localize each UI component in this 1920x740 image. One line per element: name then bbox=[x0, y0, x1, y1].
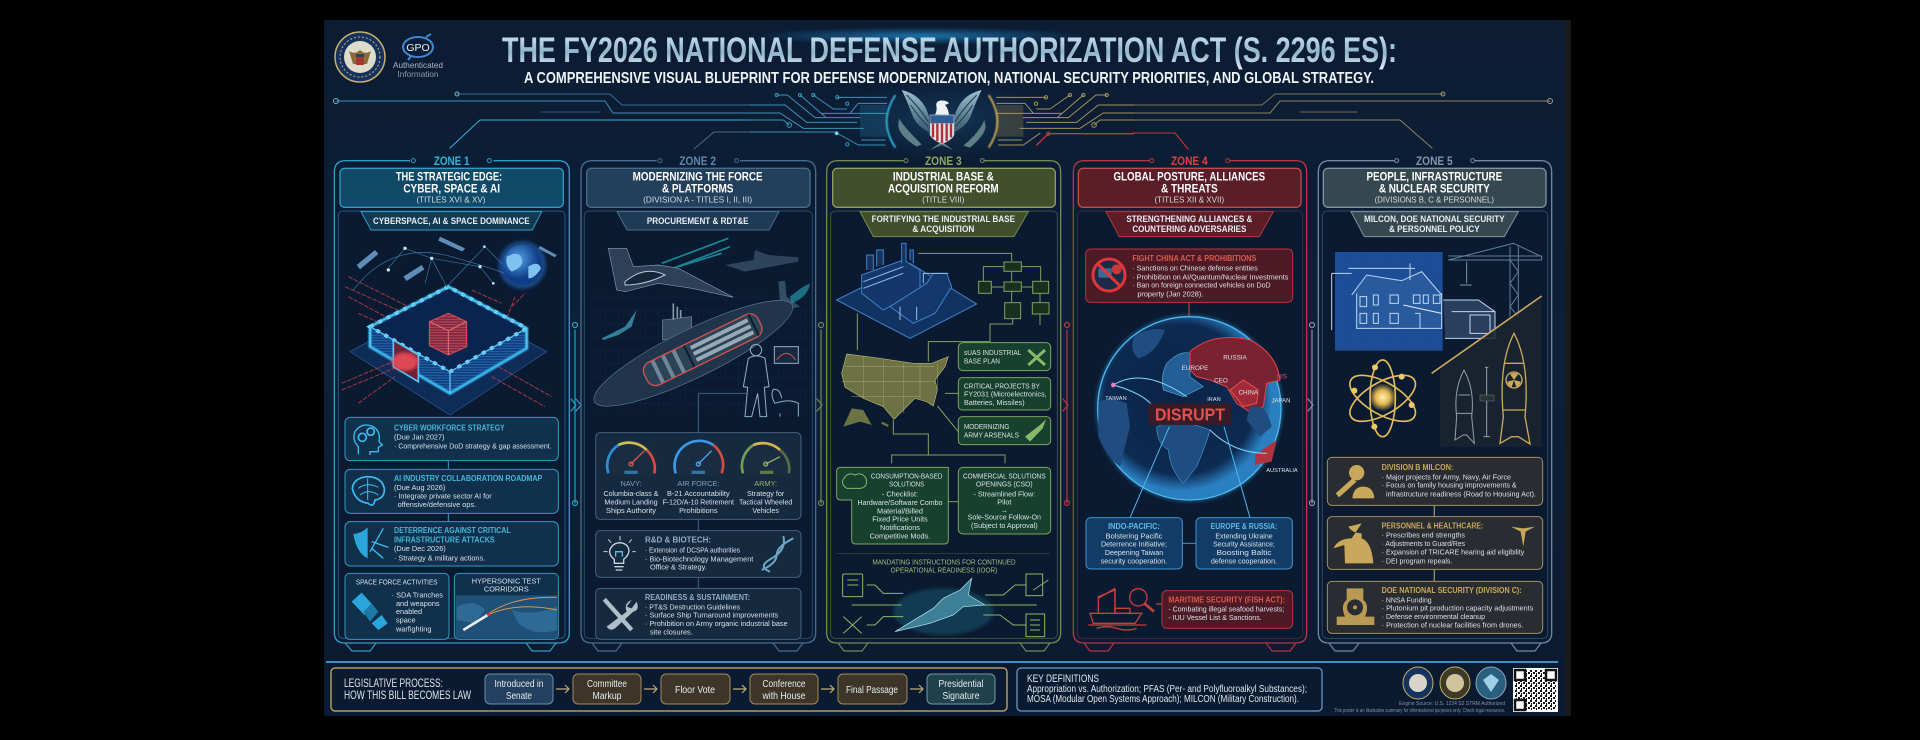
zone 4 title box bbox=[1078, 168, 1301, 207]
zone 1 title box bbox=[340, 168, 563, 207]
cards: zone 1 bbox=[345, 417, 558, 639]
card: Indo-Pacific bbox=[1086, 518, 1182, 569]
card: personnel and healthcare: · Prescribes end strengths bbox=[1382, 531, 1465, 540]
card: deterrence: · Strategy & military actions. bbox=[394, 553, 485, 562]
card: consumption solutions: SOLUTIONS bbox=[889, 480, 924, 489]
zone 1 subheading bbox=[361, 212, 542, 230]
panel: zone 2 bbox=[581, 154, 816, 643]
card: division B milcon: infrastructure readiness (Road to Housing Act). bbox=[1386, 490, 1536, 499]
panel: key definitions: Appropriation vs. Authorization; PFAS (Per- and Polyfluoroalkyl Substances); bbox=[1027, 684, 1307, 695]
card: DOE national security: · Plutonium pit production capacity adjustments bbox=[1382, 604, 1534, 613]
card: personnel and healthcare: · Expansion of TRICARE hearing aid eligibility bbox=[1382, 547, 1525, 556]
illustration: globe with disrupt: CHINA bbox=[1238, 390, 1259, 397]
zone 3 title box: INDUSTRIAL BASE & bbox=[893, 171, 994, 184]
card: personnel and healthcare: PERSONNEL & HEALTHCARE: bbox=[1382, 522, 1483, 531]
vertical connector line bbox=[698, 393, 748, 433]
card: AI roadmap bbox=[345, 461, 558, 513]
logo: GPO authenticated: Information bbox=[398, 70, 438, 79]
illustration: satellite network and globe bbox=[353, 237, 557, 290]
zone 4 subheading bbox=[1106, 212, 1273, 237]
card: platform gauges: ARMY: bbox=[754, 479, 777, 488]
card: space force: space bbox=[396, 616, 416, 625]
card: maritime security bbox=[1162, 591, 1293, 628]
circuit lines: outer bbox=[334, 92, 1552, 149]
card: cyber workforce bbox=[345, 417, 558, 461]
frame feet bbox=[345, 643, 1541, 651]
step: introduced: Senate bbox=[506, 690, 532, 702]
card: commercial solutions: - Streamlined Flow: bbox=[973, 490, 1035, 499]
card: critical projects: FY2031 (Microelectronics, bbox=[964, 390, 1047, 399]
zone 4 title box: GLOBAL POSTURE, ALLIANCES bbox=[1113, 171, 1265, 184]
illustration: soldier and dog bbox=[743, 344, 798, 417]
card: space force: SPACE FORCE ACTIVITIES bbox=[356, 577, 438, 586]
zone 5 title box: PEOPLE, INFRASTRUCTURE bbox=[1366, 171, 1502, 184]
fine print: This poster is an illustrative summary for informational purposes only. Check legal resources. bbox=[1334, 708, 1505, 714]
infographic background bbox=[324, 20, 1571, 716]
divider heading: IOOR bbox=[837, 553, 1050, 575]
fine print bbox=[1334, 701, 1505, 714]
fine print: Engine Source: U.S. 1234 S2 STRM Authorized bbox=[1399, 701, 1505, 707]
illustration: torpedo bbox=[602, 310, 637, 340]
panel: zone 1 bbox=[334, 154, 569, 643]
zone 2 subheading: PROCUREMENT & RDT&E bbox=[647, 216, 748, 226]
zone 1 inner panel bbox=[338, 211, 565, 638]
card: sUAS: sUAS INDUSTRIAL bbox=[964, 348, 1021, 357]
gold bracket bbox=[989, 96, 997, 147]
card: readiness bbox=[596, 588, 801, 639]
card: sUAS bbox=[958, 343, 1051, 371]
logo: Senate seal bbox=[335, 32, 385, 82]
step: introduced: Introduced in bbox=[494, 678, 544, 690]
panel: legislative process bbox=[331, 668, 1007, 711]
card: readiness: READINESS & SUSTAINMENT: bbox=[645, 593, 750, 602]
step: conference: with House bbox=[762, 690, 806, 702]
step: signature: Signature bbox=[942, 690, 980, 702]
card: arsenals: ARMY ARSENALS bbox=[964, 431, 1019, 440]
card: platform gauges: F-12D/A-10 Retirement bbox=[663, 498, 734, 507]
step: conference bbox=[750, 674, 818, 704]
zone 5 label: ZONE 5 bbox=[1416, 154, 1453, 168]
card: consumption solutions: Competitive Mods. bbox=[870, 531, 930, 540]
zone 1 label: ZONE 1 bbox=[434, 154, 470, 168]
illustration: globe with disrupt: CEO bbox=[1214, 378, 1228, 385]
card: personnel and healthcare: · DEI program repeals. bbox=[1382, 556, 1452, 565]
card: commercial solutions: (Subject to Approval) bbox=[971, 521, 1038, 530]
card: critical projects bbox=[958, 378, 1051, 410]
icon: atom bbox=[1343, 360, 1422, 437]
zone 2 title box: (DIVISION A - TITLES I, II, III) bbox=[643, 194, 752, 204]
card: hypersonic corridors: CORRIDORS bbox=[484, 585, 529, 594]
zone 1 title box: THE STRATEGIC EDGE: bbox=[396, 171, 502, 184]
feather lines bbox=[907, 95, 977, 127]
zone connectors bbox=[571, 322, 1314, 506]
zone 3 label: ZONE 3 bbox=[925, 154, 962, 168]
card: R&D and biotech bbox=[596, 519, 801, 588]
card: platform gauges: Tactical Wheeled bbox=[739, 498, 792, 507]
card: FIGHT China: · Ban on foreign connected vehicles on DoD bbox=[1132, 281, 1271, 290]
illustration: distant jet bbox=[725, 250, 798, 272]
card: arsenals: MODERNIZING bbox=[964, 422, 1010, 431]
illustration: globe with disrupt bbox=[1095, 314, 1298, 518]
illustration: house blueprint bbox=[1332, 252, 1495, 351]
card: personnel and healthcare: · Adjustments to Guard/Res bbox=[1382, 539, 1465, 548]
tail bbox=[930, 142, 953, 150]
card: Europe and Russia bbox=[1182, 518, 1292, 569]
zone 5 title box: & NUCLEAR SECURITY bbox=[1379, 183, 1490, 196]
zone 5 title box bbox=[1323, 168, 1546, 207]
card: arsenals bbox=[958, 417, 1051, 445]
card: commercial solutions: COMMERCIAL SOLUTIONS bbox=[963, 471, 1046, 480]
card: Indo-Pacific: security cooperation. bbox=[1101, 557, 1167, 566]
zone 3 label bbox=[904, 154, 984, 168]
card: consumption solutions: Notifications bbox=[880, 523, 920, 532]
card: consumption solutions bbox=[837, 467, 948, 544]
card: commercial solutions: OPENINGS (CSO) bbox=[976, 480, 1033, 489]
card: FIGHT China: · Sanctions on Chinese defense entities bbox=[1132, 264, 1258, 273]
card: AI roadmap: AI INDUSTRY COLLABORATION ROADMAP bbox=[394, 474, 543, 483]
card: Indo-Pacific: Bolstering Pacific bbox=[1106, 531, 1163, 540]
card: hypersonic corridors bbox=[454, 573, 558, 639]
zone 1 title box: (TITLES XVI & XV) bbox=[416, 194, 486, 204]
illustration: cyber fortress bbox=[342, 250, 552, 415]
card: commercial solutions: → bbox=[1001, 505, 1008, 514]
illustration: globe with disrupt: DISRUPT bbox=[1155, 405, 1225, 425]
right circuit traces bbox=[997, 93, 1133, 145]
illustration: blueprint grid bbox=[592, 293, 812, 410]
legislative heading: LEGISLATIVE PROCESS: bbox=[344, 676, 443, 690]
step: markup bbox=[573, 674, 641, 704]
card: Europe and Russia: EUROPE & RUSSIA: bbox=[1211, 522, 1277, 531]
card: platform gauges: Vehicles bbox=[752, 506, 779, 515]
card: critical projects: CRITICAL PROJECTS BY bbox=[964, 381, 1040, 390]
logo: GPO authenticated bbox=[393, 34, 443, 79]
step: introduced bbox=[485, 674, 553, 704]
zone 5 title box: (DIVISIONS B, C & PERSONNEL) bbox=[1375, 194, 1494, 204]
panel: zone 5 bbox=[1318, 154, 1552, 643]
card: AI roadmap: offensive/defensive ops. bbox=[398, 500, 476, 509]
title: THE FY2026 NATIONAL DEFENSE AUTHORIZATION ACT (S. 2296 ES): bbox=[502, 31, 1397, 70]
illustration: fighter jet with icons bbox=[843, 574, 1048, 637]
card: division B milcon: DIVISION B MILCON: bbox=[1382, 463, 1453, 472]
illustration: globe with disrupt: TAIWAN bbox=[1105, 396, 1127, 402]
left circuit traces bbox=[750, 93, 887, 146]
zone 3 frame bbox=[827, 161, 1061, 643]
zone 5 inner panel bbox=[1322, 211, 1548, 638]
zone 4 label: ZONE 4 bbox=[1171, 154, 1208, 168]
card: platform gauges: Columbia-class & bbox=[603, 489, 659, 498]
card: hypersonic corridors: HYPERSONIC TEST bbox=[472, 576, 541, 585]
zone 2 title box: & PLATFORMS bbox=[662, 183, 734, 196]
card: consumption solutions: CONSUMPTION-BASED bbox=[871, 471, 942, 480]
card: readiness: site closures. bbox=[650, 627, 693, 636]
card: Europe and Russia: Extending Ukraine bbox=[1215, 531, 1273, 540]
step: signature: Presidential bbox=[938, 678, 984, 690]
legislative heading bbox=[344, 676, 471, 702]
emblem: eagle and shield bbox=[898, 90, 986, 150]
illustration: globe with disrupt: IRAN bbox=[1207, 397, 1221, 403]
illustration: US map bbox=[842, 313, 1005, 463]
card: DOE national security: · Protection of nuclear facilities from drones. bbox=[1382, 620, 1523, 629]
card: Indo-Pacific: Deepening Taiwan bbox=[1105, 548, 1163, 557]
step: floor vote: Floor Vote bbox=[675, 684, 715, 696]
illustration: missile panel bbox=[1432, 296, 1542, 447]
panel: zone 3 bbox=[827, 154, 1061, 643]
card: maritime security: - Combating illegal seafood harvests; bbox=[1168, 605, 1284, 614]
card: space force: · SDA Tranches bbox=[392, 591, 443, 600]
wings bbox=[902, 90, 929, 132]
card: AI roadmap: (Due Aug 2026) bbox=[394, 483, 445, 492]
card: cyber workforce: (Due Jan 2027) bbox=[394, 432, 445, 441]
zone 5 subheading: & PERSONNEL POLICY bbox=[1389, 224, 1480, 234]
card: R&D and biotech: · Extension of DCSPA authorities bbox=[645, 546, 740, 555]
zone 1 label bbox=[411, 154, 491, 168]
QR code bbox=[1513, 668, 1558, 712]
card: cyber workforce: CYBER WORKFORCE STRATEGY bbox=[394, 423, 505, 432]
card: Europe and Russia: Boosting Baltic bbox=[1216, 548, 1272, 557]
logo: GPO authenticated: Authenticated bbox=[393, 60, 443, 70]
process arrows bbox=[556, 685, 923, 693]
card: commercial solutions: Pilot bbox=[997, 497, 1011, 506]
zone 4 inner panel bbox=[1077, 211, 1303, 638]
zone 4 subheading: STRENGTHENING ALLIANCES & bbox=[1126, 214, 1253, 224]
zone 2 frame bbox=[581, 161, 816, 643]
zone 5 subheading bbox=[1351, 212, 1518, 237]
card: consumption solutions: Hardware/Software Combo bbox=[857, 498, 942, 507]
zone 1 subheading: CYBERSPACE, AI & SPACE DOMINANCE bbox=[373, 216, 530, 226]
step: final passage bbox=[838, 674, 907, 704]
cyan bracket bbox=[887, 96, 895, 147]
illustration: factory bbox=[837, 243, 977, 338]
step: markup: Markup bbox=[592, 690, 622, 702]
card: division B milcon bbox=[1327, 457, 1543, 581]
zone 2 label: ZONE 2 bbox=[679, 154, 716, 168]
step: markup: Committee bbox=[587, 678, 627, 690]
center glow bbox=[832, 78, 1052, 158]
card: deterrence: (Due Dec 2026) bbox=[394, 544, 446, 553]
card: division B milcon: · Focus on family housing improvements & bbox=[1382, 481, 1517, 490]
card: platform gauges: Prohibitions bbox=[679, 506, 718, 515]
card: FIGHT China: · Prohibition on AI/Quantum/Nuclear Investments bbox=[1132, 272, 1289, 281]
footer divider line bbox=[326, 661, 1558, 663]
red circuit trace bbox=[1037, 132, 1133, 145]
zone 3 title box: (TITLE VIII) bbox=[922, 194, 965, 204]
zone 4 subheading: COUNTERING ADVERSARIES bbox=[1132, 224, 1246, 234]
card: R&D and biotech: R&D & BIOTECH: bbox=[645, 536, 711, 545]
card: platform gauges: NAVY: bbox=[620, 479, 642, 488]
card: FIGHT China: property (Jan 2028). bbox=[1137, 289, 1203, 298]
divider heading: IOOR: MANDATING INSTRUCTIONS FOR CONTINUED bbox=[872, 557, 1016, 566]
card: R&D and biotech: Office & Strategy. bbox=[650, 563, 707, 572]
zone 3 inner panel bbox=[831, 211, 1057, 638]
card: Europe and Russia: defense cooperation. bbox=[1211, 557, 1277, 566]
step: floor vote bbox=[661, 674, 730, 704]
zone 2 label bbox=[658, 154, 739, 168]
card: space force: enabled bbox=[396, 607, 422, 616]
card: division B milcon: · Major projects for Army, Navy, Air Force bbox=[1382, 472, 1511, 481]
zone 4 label bbox=[1150, 154, 1230, 168]
step: signature bbox=[927, 674, 995, 704]
card: Indo-Pacific: Deterrence Initiative; bbox=[1101, 540, 1167, 549]
card: commercial solutions bbox=[948, 467, 1051, 534]
illustration: stealth bomber bbox=[608, 238, 733, 297]
olive branches bbox=[898, 118, 986, 148]
card: sUAS: BASE PLAN bbox=[964, 357, 1000, 366]
illustration: globe with disrupt: EUROPE bbox=[1182, 365, 1208, 372]
card: DOE national security: · NNSA Funding bbox=[1382, 596, 1432, 605]
card: maritime security: - IUU Vessel List & Sanctions. bbox=[1168, 613, 1262, 622]
step: conference: Conference bbox=[762, 678, 806, 690]
illustration: process flow bbox=[918, 253, 1049, 362]
zone 3 subheading: FORTIFYING THE INDUSTRIAL BASE bbox=[872, 214, 1015, 224]
card: platform gauges: AIR FORCE: bbox=[677, 479, 719, 488]
card: space force: and weapons bbox=[396, 599, 440, 608]
card: DOE national security: DOE NATIONAL SECURITY (DIVISION C): bbox=[1382, 586, 1522, 595]
shield bbox=[930, 115, 954, 144]
step: final passage: Final Passage bbox=[846, 684, 898, 696]
cards: zone 2 bbox=[596, 433, 801, 639]
zone 3 subheading bbox=[860, 212, 1028, 237]
card: Indo-Pacific: INDO-PACIFIC: bbox=[1108, 522, 1160, 531]
zone 4 title box: & THREATS bbox=[1161, 183, 1218, 196]
panel: key definitions: KEY DEFINITIONS bbox=[1027, 673, 1099, 685]
illustration: globe with disrupt: RUSSIA bbox=[1223, 355, 1248, 362]
card: consumption solutions: - Checklist: bbox=[882, 490, 918, 499]
divider heading: IOOR: OPERATIONAL READINESS (IOOR) bbox=[891, 566, 997, 575]
card: personnel and healthcare bbox=[1327, 517, 1543, 569]
zone 3 title box bbox=[833, 168, 1055, 207]
logos: agency seals bbox=[1403, 667, 1506, 699]
circuit lines: center bbox=[750, 93, 1133, 147]
panel: zone 4 bbox=[1073, 154, 1307, 643]
card: DOE national security bbox=[1327, 581, 1543, 633]
panel: key definitions: MOSA (Modular Open Systems Approach); MILCON (Military Construction). bbox=[1027, 694, 1299, 705]
card: readiness: · Surface Ship Turnaround improvements bbox=[645, 611, 779, 620]
zone 2 title box bbox=[587, 168, 810, 207]
card: R&D and biotech: · Bio-Biotechnology Management bbox=[645, 554, 753, 563]
panel: key definitions bbox=[1017, 668, 1322, 711]
card: FIGHT China: FIGHT CHINA ACT & PROHIBITIONS bbox=[1132, 254, 1257, 263]
card: platform gauges: Strategy for bbox=[747, 489, 785, 498]
subtitle: A COMPREHENSIVE VISUAL BLUEPRINT FOR DEFENSE MODERNIZATION, NATIONAL SECURITY PRIORITIES, AND GLOBAL STRATEGY. bbox=[524, 70, 1374, 87]
zone 1 frame bbox=[334, 161, 569, 643]
card: Europe and Russia: Security Assistance; bbox=[1213, 540, 1275, 549]
card: consumption solutions: Fixed Price Units bbox=[872, 515, 928, 524]
zone 2 inner panel bbox=[584, 211, 812, 638]
legislative heading: HOW THIS BILL BECOMES LAW bbox=[344, 688, 471, 702]
card: FIGHT China bbox=[1086, 249, 1293, 353]
card: AI roadmap: · Integrate private sector AI for bbox=[394, 492, 492, 501]
illustration: crane bbox=[1448, 243, 1542, 317]
card: cyber workforce: · Comprehensive DoD strategy & gap assessment. bbox=[394, 441, 552, 450]
card: DOE national security: · Defense environmental cleanup bbox=[1382, 612, 1485, 621]
zone 5 frame bbox=[1318, 161, 1552, 643]
illustration: globe with disrupt: N/S bbox=[1277, 375, 1287, 381]
zone 4 title box: (TITLES XII & XVII) bbox=[1154, 194, 1224, 204]
zone 2 title box: MODERNIZING THE FORCE bbox=[633, 171, 763, 184]
illustration: globe with disrupt: AUSTRALIA bbox=[1266, 468, 1298, 474]
card: platform gauges: Medium Landing bbox=[604, 498, 658, 507]
card: readiness: · PT&S Destruction Guidelines bbox=[645, 602, 740, 611]
card: platform gauges bbox=[596, 433, 801, 519]
card: deterrence: DETERRENCE AGAINST CRITICAL bbox=[394, 526, 511, 535]
card: readiness: · Prohibition on Army organic industrial base bbox=[645, 619, 788, 628]
zone 5 label bbox=[1395, 154, 1475, 168]
logo: GPO authenticated: GPO bbox=[406, 42, 430, 54]
card: maritime security: MARITIME SECURITY (FISH ACT): bbox=[1168, 595, 1285, 604]
card: commercial solutions: Sole-Source Follow-On bbox=[968, 512, 1041, 521]
zone 5 subheading: MILCON, DOE NATIONAL SECURITY bbox=[1364, 214, 1505, 224]
zone 4 frame bbox=[1073, 161, 1307, 643]
card: space force: warfighting bbox=[395, 624, 431, 633]
card: critical projects: Batteries, Missiles) bbox=[964, 398, 1025, 407]
zone 3 subheading: & ACQUISITION bbox=[912, 224, 974, 234]
zone 1 title box: CYBER, SPACE & AI bbox=[403, 183, 500, 196]
head bbox=[935, 101, 949, 115]
icon: ship and magnifier bbox=[1088, 588, 1162, 630]
illustration: submarine bbox=[584, 281, 810, 423]
illustration: globe with disrupt: JAPAN bbox=[1272, 399, 1290, 405]
zone 3 title box: ACQUISITION REFORM bbox=[888, 183, 999, 196]
card: deterrence: INFRASTRUCTURE ATTACKS bbox=[394, 535, 495, 544]
card: platform gauges: B-21 Accountability bbox=[667, 489, 730, 498]
zone 2 subheading bbox=[617, 212, 779, 230]
card: consumption solutions: Material/Billed bbox=[877, 506, 923, 515]
card: platform gauges: Ships Authority bbox=[606, 506, 656, 515]
card: space force bbox=[345, 573, 449, 639]
card: deterrence bbox=[345, 513, 558, 566]
header glow bbox=[750, 27, 1090, 45]
